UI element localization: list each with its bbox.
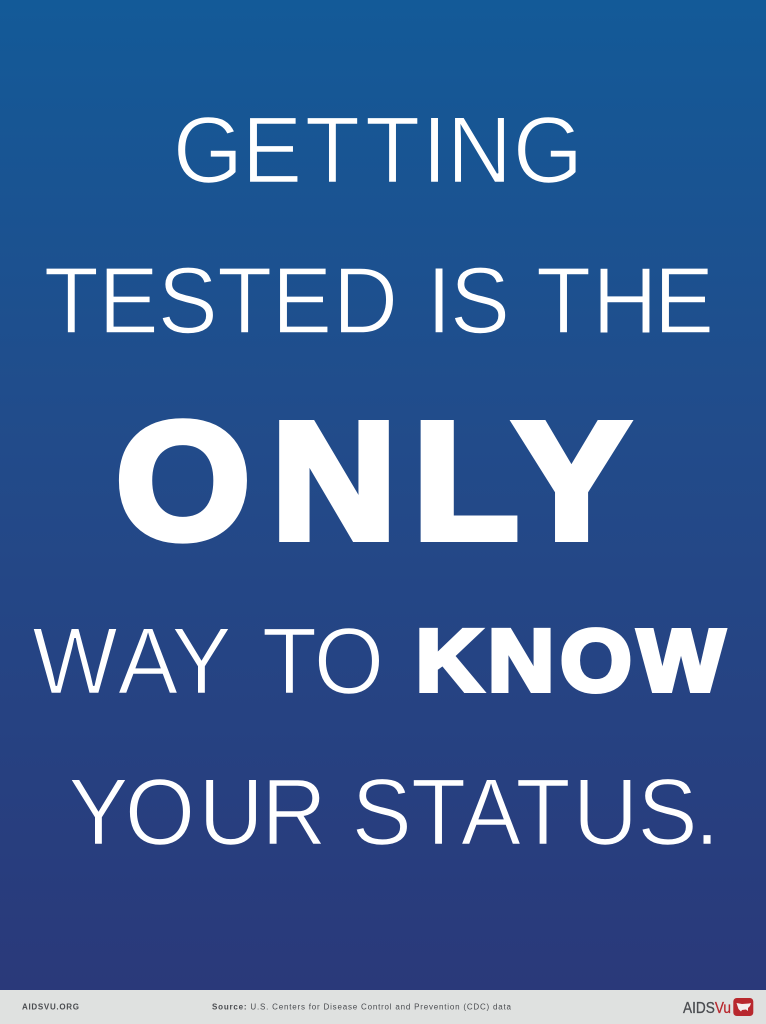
source note: Source: U.S. Centers for Disease Control and Prevention (CDC) data	[212, 1002, 512, 1012]
line: WAY TO KNOW	[32, 607, 725, 714]
logo wordmark: AIDSVu	[683, 1000, 731, 1017]
line: TESTED IS THE: TESTED IS THE	[44, 247, 714, 354]
footer bar	[0, 990, 766, 1024]
line: YOUR STATUS.: YOUR STATUS.	[68, 758, 720, 865]
line: GETTING: GETTING	[173, 96, 583, 203]
icon: US map badge	[733, 998, 753, 1016]
words: WAY TO: WAY TO	[32, 607, 384, 714]
headline	[32, 96, 725, 865]
word: KNOW: KNOW	[416, 611, 725, 709]
footer url: AIDSVU.ORG	[22, 1002, 79, 1012]
AIDSVu logo	[683, 998, 753, 1017]
line: ONLY: ONLY	[116, 388, 629, 573]
